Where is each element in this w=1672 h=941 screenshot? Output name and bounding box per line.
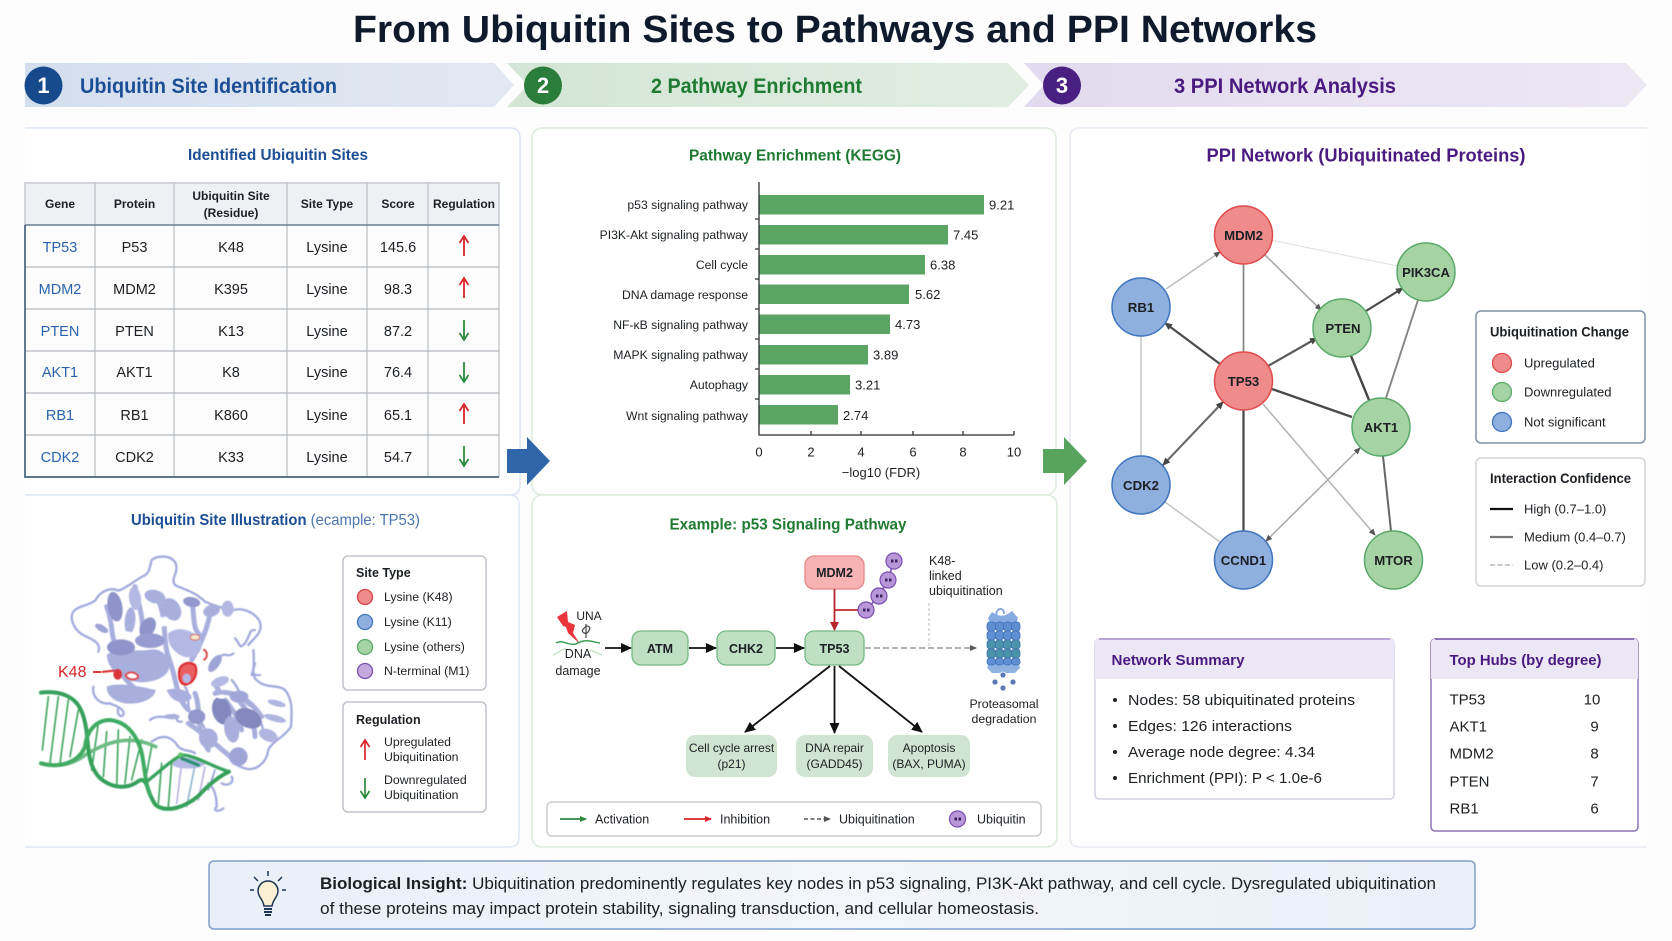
network graph <box>1112 206 1455 589</box>
bar chart: KEGG enrichment: 7.45 <box>953 228 978 242</box>
bar chart: KEGG enrichment: Wnt signaling pathway <box>626 409 749 423</box>
legend: regulation: Downregulated <box>384 773 467 787</box>
table: ubiquitin sites: Protein <box>114 197 155 211</box>
icon: DNA damage: UNA <box>576 609 602 623</box>
label: K48: K48 <box>58 664 87 681</box>
legend: ubiquitination change: Downregulated <box>1524 384 1611 400</box>
bar chart: KEGG enrichment: 6 <box>909 444 917 460</box>
card: top hubs: PTEN <box>1450 774 1490 790</box>
legend: ubiquitination change <box>1476 311 1645 443</box>
card: top hubs: 6 <box>1590 800 1599 818</box>
arrow: step 1 to step 2 <box>507 437 550 485</box>
legend: interaction confidence: High (0.7–1.0) <box>1524 502 1606 516</box>
table: ubiquitin sites: Lysine <box>306 240 348 256</box>
node: PTEN: PTEN <box>1325 321 1361 336</box>
panel: p53 signaling pathway <box>532 495 1057 847</box>
icon: proteasome <box>987 609 1020 691</box>
bar chart: KEGG enrichment: NF-κB signaling pathway <box>613 318 749 332</box>
legend: pathway edges: Ubiquitin <box>977 812 1026 826</box>
outcome: apoptosis: (BAX, PUMA) <box>892 757 966 771</box>
card: top hubs <box>1431 639 1638 831</box>
node: TP53 <box>1214 352 1272 410</box>
heading: PPI network: PPI Network (Ubiquitinated Proteins) <box>1206 146 1526 166</box>
pathway node: TP53 <box>805 631 864 665</box>
legend: site type: Lysine (others) <box>384 640 465 654</box>
legend: regulation <box>343 702 486 812</box>
arrow: step 2 to step 3 <box>1043 437 1087 485</box>
pathway node: TP53: TP53 <box>820 642 849 656</box>
bar chart: KEGG enrichment: 0 <box>755 444 763 460</box>
bar chart: KEGG enrichment: 4 <box>857 444 865 460</box>
pathway node: ATM <box>632 631 688 665</box>
node: PIK3CA <box>1397 243 1455 301</box>
card: top hubs: 9 <box>1590 718 1599 736</box>
node: CCND1 <box>1214 531 1272 589</box>
label: proteasomal degradation <box>969 697 1039 726</box>
card: network summary: Nodes: 58 ubiquitinated proteins <box>1128 692 1355 709</box>
icon: lightbulb <box>250 871 286 915</box>
table: ubiquitin sites: Lysine <box>306 408 348 424</box>
bar chart: KEGG enrichment: 5.62 <box>915 287 940 302</box>
table: ubiquitin sites: 65.1 <box>384 408 412 424</box>
annotation: K48-linked ubiquitination: K48- <box>929 554 955 568</box>
table: ubiquitin sites: CDK2 <box>115 450 154 466</box>
table: ubiquitin sites: MDM2 <box>39 282 81 298</box>
bar chart: KEGG enrichment: Cell cycle <box>696 258 748 272</box>
icon: DNA damage: DNA <box>565 647 592 661</box>
node: PIK3CA: PIK3CA <box>1402 265 1450 280</box>
bar chart: KEGG enrichment: 6.38 <box>930 258 955 272</box>
table: ubiquitin sites: Lysine <box>306 450 348 466</box>
ubiquitination highlights <box>102 635 207 685</box>
callout: biological insight <box>209 861 1475 929</box>
table: ubiquitin sites: K395 <box>214 282 248 298</box>
pathway node: MDM2: MDM2 <box>816 566 853 580</box>
legend: interaction confidence: Low (0.2–0.4) <box>1524 558 1604 572</box>
card: top hubs: 7 <box>1590 774 1599 790</box>
insight text: Biological Insight: Ubiquitination predominently regulates key nodes in p53 signaling, PI3K-Akt pathway, and cell cycle. Dysregulated ubiquitination <box>320 874 1436 893</box>
heading: ubiquitin site illustration: Ubiquitin Site Illustration (ecample: TP53) <box>131 512 420 529</box>
outcome: apoptosis: Apoptosis <box>903 741 955 755</box>
card: top hubs: 10 <box>1584 692 1600 708</box>
bar chart: KEGG enrichment: Autophagy <box>690 378 749 392</box>
table: ubiquitin sites: MDM2 <box>113 282 156 298</box>
card: network summary: Average node degree: 4.34 <box>1128 744 1315 761</box>
node: MDM2 <box>1214 206 1272 264</box>
heading: pathway enrichment: Pathway Enrichment (KEGG) <box>689 148 901 164</box>
table: ubiquitin sites: 87.2 <box>384 324 412 340</box>
bar chart: KEGG enrichment: 10 <box>1007 444 1021 460</box>
node: AKT1: AKT1 <box>1364 420 1398 435</box>
card: top hubs: 8 <box>1590 746 1599 762</box>
card: top hubs: RB1 <box>1450 800 1479 818</box>
table: ubiquitin sites: PTEN <box>41 324 79 340</box>
outcome: cell cycle arrest <box>686 735 777 777</box>
label: proteasomal degradation: Proteasomal <box>969 697 1039 711</box>
legend: ubiquitination change: Ubiquitination Change <box>1490 324 1629 340</box>
table: ubiquitin sites: TP53 <box>43 240 77 256</box>
outcome: apoptosis <box>888 735 970 777</box>
outcome: DNA repair: DNA repair <box>805 741 864 755</box>
table: ubiquitin sites: 145.6 <box>380 240 416 256</box>
outcome: cell cycle arrest: Cell cycle arrest <box>689 741 775 755</box>
legend: pathway edges <box>547 802 1041 836</box>
node: RB1: RB1 <box>1128 300 1154 315</box>
legend: site type: Site Type <box>356 566 411 580</box>
icon: DNA damage: damage <box>555 664 601 678</box>
table: ubiquitin sites: AKT1 <box>42 365 78 381</box>
table: ubiquitin sites: PTEN <box>115 324 154 340</box>
table: ubiquitin sites: Lysine <box>306 282 348 298</box>
node: CDK2: CDK2 <box>1123 478 1159 493</box>
table: ubiquitin sites: Lysine <box>306 365 348 381</box>
table: ubiquitin sites: Regulation <box>433 197 495 211</box>
panel: identified ubiquitin sites <box>25 128 520 495</box>
DNA helix <box>41 692 229 809</box>
panel: ubiquitin site illustration <box>25 495 519 847</box>
node: MDM2: MDM2 <box>1224 228 1263 243</box>
legend: ubiquitination change: Not significant <box>1524 414 1606 430</box>
step banner 1: 1 <box>37 73 50 98</box>
insight text: of these proteins may impact protein stability, signaling transduction, and cellular homeostasis. <box>320 899 1039 918</box>
step banner 2: 2 <box>537 73 549 98</box>
icon: DNA damage <box>553 609 602 678</box>
legend: ubiquitination change: Upregulated <box>1524 356 1595 370</box>
pathway node: CHK2: CHK2 <box>729 642 763 656</box>
bar chart: KEGG enrichment: 2 <box>807 444 815 460</box>
legend: regulation: Regulation <box>356 713 421 727</box>
pathway node: CHK2 <box>717 631 775 665</box>
table: ubiquitin sites: Gene <box>45 197 75 211</box>
title: From Ubiquitin Sites to Pathways and PPI Networks <box>353 9 1317 51</box>
bar chart: KEGG enrichment: 9.21 <box>989 198 1014 212</box>
bar chart: KEGG enrichment: 2.74 <box>843 408 868 423</box>
label: proteasomal degradation: degradation <box>972 712 1037 726</box>
legend: regulation: Upregulated <box>384 735 451 749</box>
card: network summary: Network Summary <box>1112 652 1245 669</box>
node: MTOR <box>1364 531 1422 589</box>
regulation arrows <box>460 236 468 466</box>
node: PTEN <box>1313 299 1371 357</box>
step banner 2: 2 Pathway Enrichment <box>651 75 862 98</box>
card: network summary: Edges: 126 interactions <box>1128 718 1292 735</box>
table: ubiquitin sites: 98.3 <box>384 282 412 298</box>
table: ubiquitin sites: Score <box>381 197 415 211</box>
card: top hubs: TP53 <box>1450 692 1485 708</box>
bar chart: KEGG enrichment: DNA damage response <box>622 288 748 302</box>
table: ubiquitin sites: Ubiquitin Site <box>192 189 270 203</box>
node: RB1 <box>1112 278 1170 336</box>
table: ubiquitin sites <box>25 182 499 477</box>
bar chart: KEGG enrichment: 3.89 <box>873 348 898 362</box>
bar chart: KEGG enrichment <box>600 182 1021 480</box>
node: MTOR: MTOR <box>1374 553 1413 568</box>
bar chart: KEGG enrichment: −log10 (FDR) <box>842 465 920 480</box>
table: ubiquitin sites: K8 <box>222 365 240 381</box>
step banner 1 <box>24 63 514 107</box>
legend: site type: N-terminal (M1) <box>384 664 469 678</box>
table: ubiquitin sites: Site Type <box>301 197 354 211</box>
annotation: K48-linked ubiquitination: ubiquitination <box>929 584 1003 598</box>
legend: regulation: Ubiquitination <box>384 750 459 764</box>
table: ubiquitin sites: K48 <box>218 240 244 256</box>
outcome: DNA repair <box>796 735 873 777</box>
node: TP53: TP53 <box>1228 374 1259 389</box>
bar chart: KEGG enrichment: 8 <box>959 444 967 460</box>
table: ubiquitin sites: P53 <box>122 240 147 256</box>
table: ubiquitin sites: Lysine <box>306 324 348 340</box>
table: ubiquitin sites: RB1 <box>46 408 74 424</box>
step banner 1: Ubiquitin Site Identification <box>80 75 337 98</box>
legend: pathway edges: Ubiquitination <box>839 812 915 826</box>
heading: example p53 pathway: Example: p53 Signaling Pathway <box>670 516 907 534</box>
table: ubiquitin sites: 54.7 <box>384 450 412 466</box>
legend: pathway edges: Inhibition <box>720 812 770 826</box>
legend: site type: Lysine (K11) <box>384 615 452 629</box>
bar chart: KEGG enrichment: PI3K-Akt signaling pathway <box>600 228 749 242</box>
table: ubiquitin sites: (Residue) <box>204 206 258 220</box>
illustration: protein structure <box>41 557 292 811</box>
legend: pathway edges: Activation <box>595 812 649 826</box>
activation arrows <box>605 648 922 733</box>
node: CCND1: CCND1 <box>1221 553 1266 568</box>
table: ubiquitin sites: AKT1 <box>116 365 153 381</box>
outcome: cell cycle arrest: (p21) <box>717 757 746 771</box>
label: K48 <box>58 664 101 681</box>
legend: regulation: Ubiquitination <box>384 788 459 802</box>
panel: PPI network <box>1070 128 1647 847</box>
step banner 3: 3 PPI Network Analysis <box>1174 75 1396 98</box>
legend: interaction confidence: Interaction Confidence <box>1490 470 1631 486</box>
legend: site type: Lysine (K48) <box>384 590 453 604</box>
legend: site type <box>343 556 486 690</box>
step banner 3: 3 <box>1056 73 1068 98</box>
table: ubiquitin sites: CDK2 <box>41 450 79 466</box>
panel: pathway enrichment <box>532 128 1056 495</box>
legend: interaction confidence: Medium (0.4–0.7) <box>1524 530 1626 544</box>
card: network summary: Enrichment (PPI): P < 1.0e-6 <box>1128 770 1322 787</box>
outcome: DNA repair: (GADD45) <box>806 757 863 771</box>
annotation: K48-linked ubiquitination: linked <box>929 569 962 583</box>
node: AKT1 <box>1352 398 1410 456</box>
bar chart: KEGG enrichment: 4.73 <box>895 317 920 332</box>
pathway node: ATM: ATM <box>647 642 673 656</box>
bar chart: KEGG enrichment: 3.21 <box>855 378 880 392</box>
card: top hubs: MDM2 <box>1450 746 1494 762</box>
card: top hubs: AKT1 <box>1450 718 1487 736</box>
ubiquitination arrow to proteasome <box>865 647 976 649</box>
protein ribbon <box>41 557 292 811</box>
network edges <box>1141 240 1418 542</box>
legend: interaction confidence <box>1476 458 1645 586</box>
table: ubiquitin sites: RB1 <box>120 408 149 424</box>
insight text <box>320 874 1436 918</box>
pathway node: MDM2 <box>805 556 864 589</box>
inhibition arrow: MDM2 to TP53 <box>834 589 836 630</box>
node: CDK2 <box>1112 456 1170 514</box>
table: ubiquitin sites: K13 <box>218 324 244 340</box>
table: ubiquitin sites: 76.4 <box>384 365 412 381</box>
step banner 3 <box>1024 63 1647 107</box>
annotation: K48-linked ubiquitination <box>929 554 1003 648</box>
table: ubiquitin sites: K860 <box>214 408 248 424</box>
heading: identified ubiquitin sites: Identified Ubiquitin Sites <box>188 147 368 164</box>
ubiquitin chain <box>834 553 902 618</box>
card: top hubs: Top Hubs (by degree) <box>1450 652 1602 669</box>
card: network summary <box>1095 639 1394 799</box>
bar chart: KEGG enrichment: p53 signaling pathway <box>627 198 749 212</box>
step banner 2 <box>507 63 1029 107</box>
table: ubiquitin sites: K33 <box>218 450 244 466</box>
bar chart: KEGG enrichment: MAPK signaling pathway <box>613 348 749 362</box>
